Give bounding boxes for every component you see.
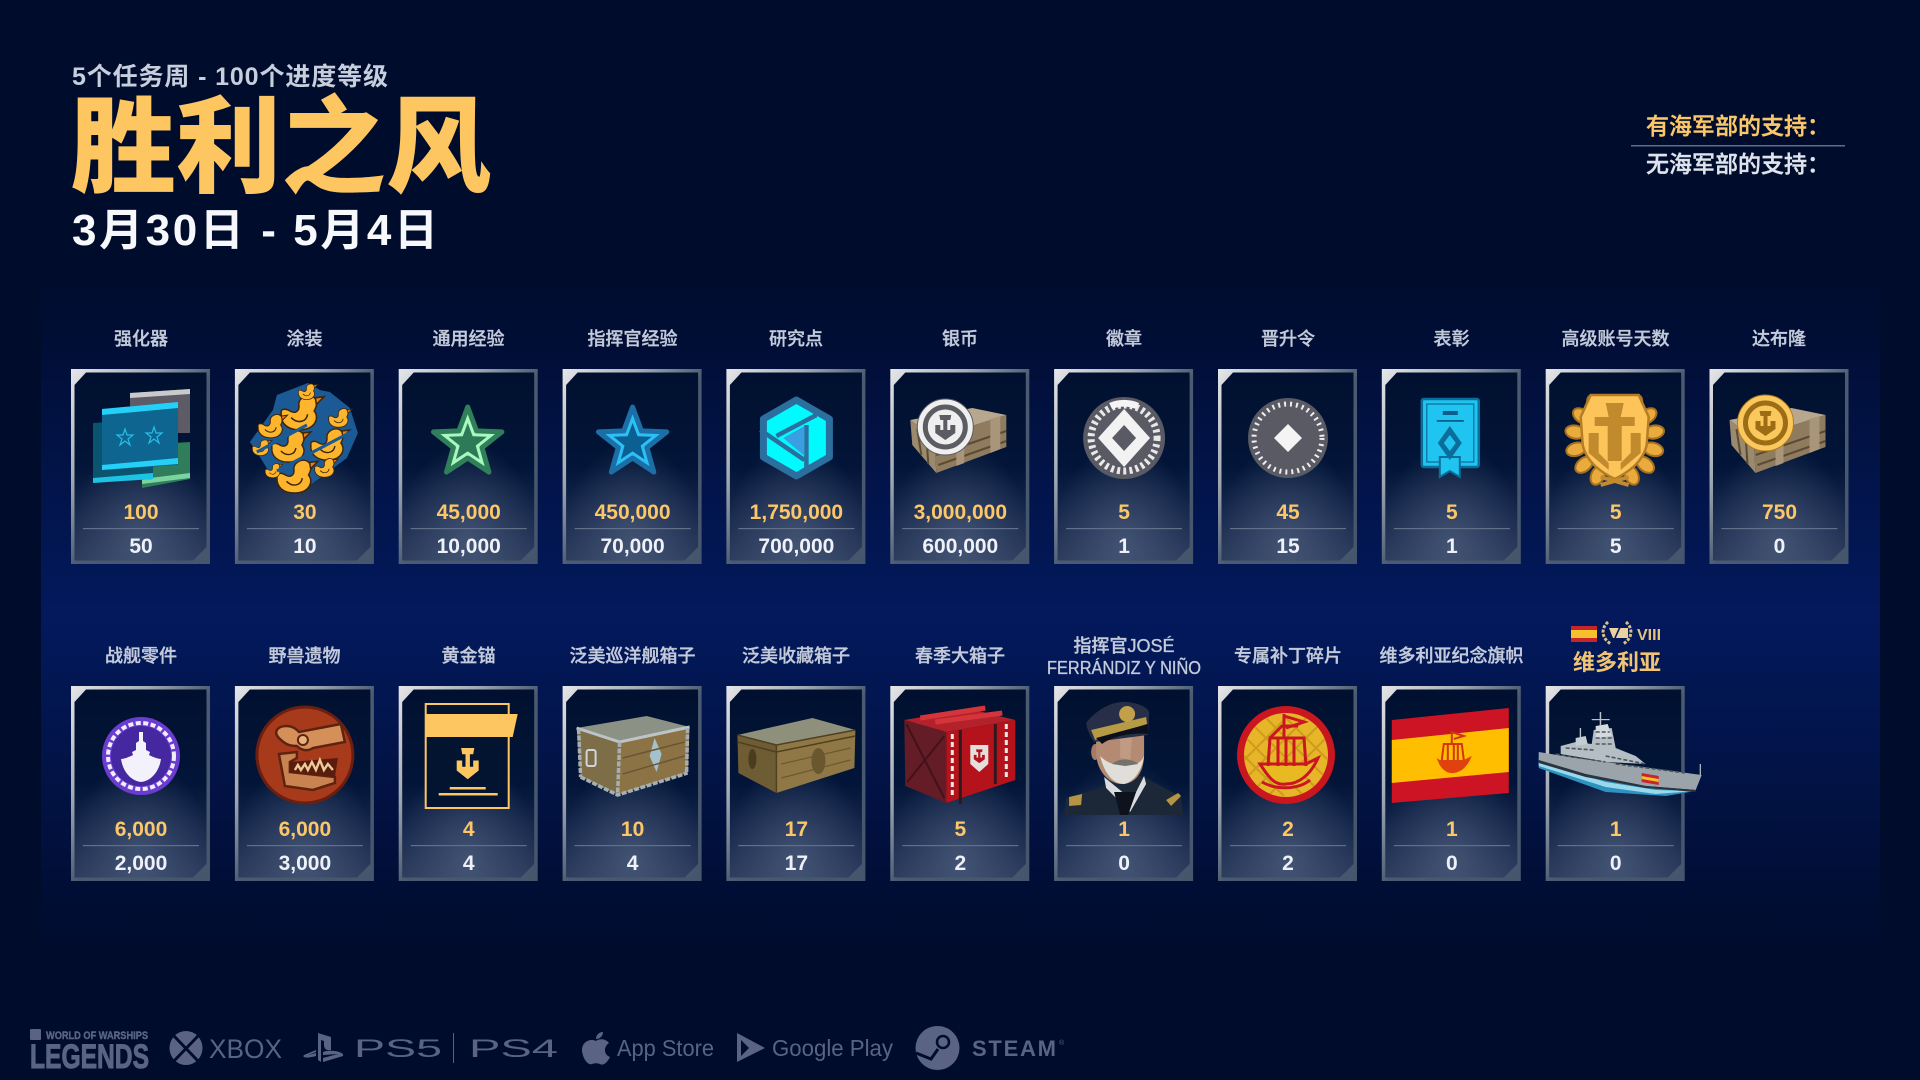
value: with admiralty: 100 — [123, 501, 159, 524]
logo: App Store — [582, 1032, 714, 1065]
tier: VIII — [1637, 627, 1661, 644]
card: 通用经验 — [399, 369, 538, 564]
card: 银币 — [890, 369, 1029, 564]
icon: promotion token — [1248, 398, 1328, 478]
label: 高级账号天数: 高级账号天数 — [1562, 329, 1670, 349]
card: 涂装 — [235, 369, 374, 564]
label: 维多利亚纪念旗帜: 维多利亚纪念旗帜 — [1380, 645, 1524, 666]
value: with admiralty: 10 — [621, 818, 644, 841]
value: without admiralty: 15 — [1276, 535, 1300, 558]
value: without admiralty: 2,000 — [115, 852, 167, 875]
card: 维多利亚纪念旗帜 — [1382, 686, 1521, 881]
card: 泛美收藏箱子 — [726, 686, 865, 881]
icon: commander portrait — [1064, 702, 1183, 815]
card: 泛美巡洋舰箱子 — [563, 686, 702, 881]
icon: Spanish commemorative flag — [1392, 708, 1509, 803]
icon: crate with silver coin — [910, 399, 1006, 473]
value: without admiralty: 1 — [1446, 535, 1458, 558]
logo: World of Warships Legends — [30, 1029, 149, 1076]
icon: ship patch — [1237, 706, 1335, 804]
date range: 3月30日 - 5月4日 — [72, 206, 438, 255]
logo: Google Play: Google Play — [772, 1035, 893, 1061]
value: with admiralty: 4 — [463, 818, 475, 841]
value: without admiralty: 0 — [1774, 535, 1785, 558]
value: without admiralty: 3,000 — [279, 852, 331, 875]
background panel — [41, 285, 1880, 945]
value: without admiralty: 70,000 — [600, 535, 665, 558]
value: without admiralty: 4 — [627, 852, 639, 875]
logo: World of Warships Legends: WORLD OF WARSHIPS — [46, 1030, 148, 1042]
value: with admiralty: 45 — [1276, 501, 1300, 524]
legend: with and without admiralty support — [1631, 107, 1845, 179]
icon: flags — [93, 389, 190, 488]
label: 指挥官JOSÉ FERRÁNDIZ Y NIÑO — [1047, 636, 1201, 678]
card: 维多利亚 ship — [1539, 686, 1702, 881]
label: 晋升令: 晋升令 — [1261, 329, 1315, 349]
value: with admiralty: 5 — [954, 818, 966, 841]
icon: golden anchor booklet — [426, 704, 518, 808]
label: 专属补丁碎片: 专属补丁碎片 — [1234, 646, 1342, 666]
value: without admiralty: 700,000 — [758, 535, 834, 558]
icon: commendation — [1422, 399, 1479, 477]
label: 徽章: 徽章 — [1106, 328, 1142, 349]
icon: duck camouflage — [250, 383, 358, 493]
card: 晋升令 — [1218, 369, 1357, 564]
value: without admiralty: 4 — [463, 852, 475, 875]
value: without admiralty: 0 — [1610, 852, 1622, 875]
icon: Spanish flag — [1571, 626, 1597, 642]
label: 表彰: 表彰 — [1434, 329, 1470, 349]
logo: PS5 and PS4: PS4 — [469, 1035, 558, 1063]
value: with admiralty: 5 — [1446, 501, 1458, 524]
icon: red spring crate — [904, 708, 1015, 804]
logo: Google Play — [737, 1033, 893, 1062]
label: 涂装: 涂装 — [286, 329, 322, 349]
card: 战舰零件 — [71, 686, 210, 881]
logo: World of Warships Legends: LEGENDS — [30, 1038, 149, 1076]
label: 通用经验: 通用经验 — [432, 329, 504, 349]
label: 战舰零件: 战舰零件 — [105, 646, 177, 666]
card: 徽章 — [1054, 369, 1193, 564]
label: 指挥官JOSÉ FERRÁNDIZ Y NIÑO: 指挥官JOSÉ — [1073, 636, 1175, 656]
logo: PS5 and PS4: PS5 — [354, 1035, 442, 1063]
label: 泛美收藏箱子: 泛美收藏箱子 — [742, 646, 850, 666]
icon: crate with gold coin — [1730, 395, 1826, 473]
label: 泛美巡洋舰箱子: 泛美巡洋舰箱子 — [570, 646, 696, 666]
label: 强化器: 强化器 — [114, 329, 168, 349]
logo: Steam — [916, 1026, 1065, 1070]
label: 指挥官JOSÉ FERRÁNDIZ Y NIÑO: FERRÁNDIZ Y NIÑO — [1047, 657, 1201, 678]
icon: cruiser container — [577, 716, 690, 795]
value: with admiralty: 5 — [1118, 501, 1130, 524]
value: without admiralty: 2 — [954, 852, 966, 875]
footer: platform logos — [30, 1026, 1065, 1076]
card: 表彰 — [1382, 369, 1521, 564]
value: with admiralty: 1 — [1118, 818, 1130, 841]
ship name: 维多利亚 — [1573, 650, 1661, 675]
value: without admiralty: 2 — [1282, 852, 1294, 875]
logo: Steam: ® — [1059, 1039, 1065, 1047]
logo: Xbox — [170, 1031, 282, 1065]
label: 野兽遗物: 野兽遗物 — [268, 646, 340, 666]
subtitle: 5个任务周 - 100个进度等级 — [72, 63, 388, 91]
icon: green star — [434, 407, 502, 472]
label: 达布隆: 达布隆 — [1752, 329, 1806, 349]
card: 高级账号天数 — [1546, 369, 1685, 564]
icon: blue star — [598, 407, 667, 472]
value: without admiralty: 10,000 — [437, 535, 501, 558]
label: 指挥官经验: 指挥官经验 — [588, 329, 678, 349]
ship heading: nation, tier and name — [1571, 622, 1661, 675]
icon: ship parts — [102, 717, 180, 795]
card: 野兽遗物 — [235, 686, 374, 881]
legend: with and without admiralty support: 有海军部的支持： — [1646, 107, 1830, 141]
value: with admiralty: 750 — [1762, 501, 1797, 524]
icon: diamond badge — [1083, 397, 1165, 479]
label: 黄金锚: 黄金锚 — [442, 646, 496, 666]
logo: Steam: STEAM — [972, 1036, 1056, 1061]
value: without admiralty: 50 — [129, 535, 153, 558]
value: with admiralty: 5 — [1610, 501, 1622, 524]
card: 指挥官经验 — [563, 369, 702, 564]
value: with admiralty: 1 — [1610, 818, 1622, 841]
card: 黄金锚 — [399, 686, 538, 881]
legend: with and without admiralty support: 无海军部的支持： — [1646, 145, 1830, 179]
value: without admiralty: 5 — [1610, 535, 1622, 558]
icon: gold laurel medal — [1564, 392, 1665, 487]
title: 胜利之风 — [71, 90, 491, 207]
icon: battleship tier laurel — [1603, 622, 1631, 644]
icon: cyan cube — [760, 400, 829, 476]
value: with admiralty: 3,000,000 — [914, 501, 1007, 524]
logo: Xbox: XBOX — [209, 1034, 282, 1064]
value: with admiralty: 450,000 — [595, 501, 671, 524]
icon: beast relic — [257, 707, 353, 803]
value: without admiralty: 10 — [293, 535, 317, 558]
value: with admiralty: 30 — [293, 501, 317, 524]
value: without admiralty: 0 — [1446, 852, 1458, 875]
card: 达布隆 — [1710, 369, 1848, 564]
card: 强化器 — [71, 369, 210, 564]
value: with admiralty: 2 — [1282, 818, 1294, 841]
value: with admiralty: 45,000 — [437, 501, 501, 524]
value: with admiralty: 1 — [1446, 818, 1458, 841]
label: 银币: 银币 — [942, 329, 978, 349]
value: with admiralty: 1,750,000 — [750, 501, 843, 524]
logo: App Store: App Store — [617, 1035, 714, 1061]
card: 专属补丁碎片 — [1218, 686, 1357, 881]
icon: collection container — [737, 718, 855, 793]
value: without admiralty: 0 — [1118, 852, 1130, 875]
value: without admiralty: 1 — [1118, 535, 1130, 558]
value: with admiralty: 6,000 — [115, 818, 167, 841]
logo: PS5 and PS4 — [303, 1033, 558, 1063]
value: with admiralty: 17 — [785, 818, 808, 841]
value: without admiralty: 600,000 — [922, 535, 998, 558]
icon: battleship — [1539, 712, 1702, 796]
label: 研究点: 研究点 — [769, 328, 823, 349]
label: 春季大箱子: 春季大箱子 — [915, 646, 1005, 666]
card: 春季大箱子 — [890, 686, 1029, 881]
card: 指挥官 — [1054, 686, 1193, 881]
value: without admiralty: 17 — [785, 852, 808, 875]
card: 研究点 — [726, 369, 865, 564]
value: with admiralty: 6,000 — [279, 818, 331, 841]
